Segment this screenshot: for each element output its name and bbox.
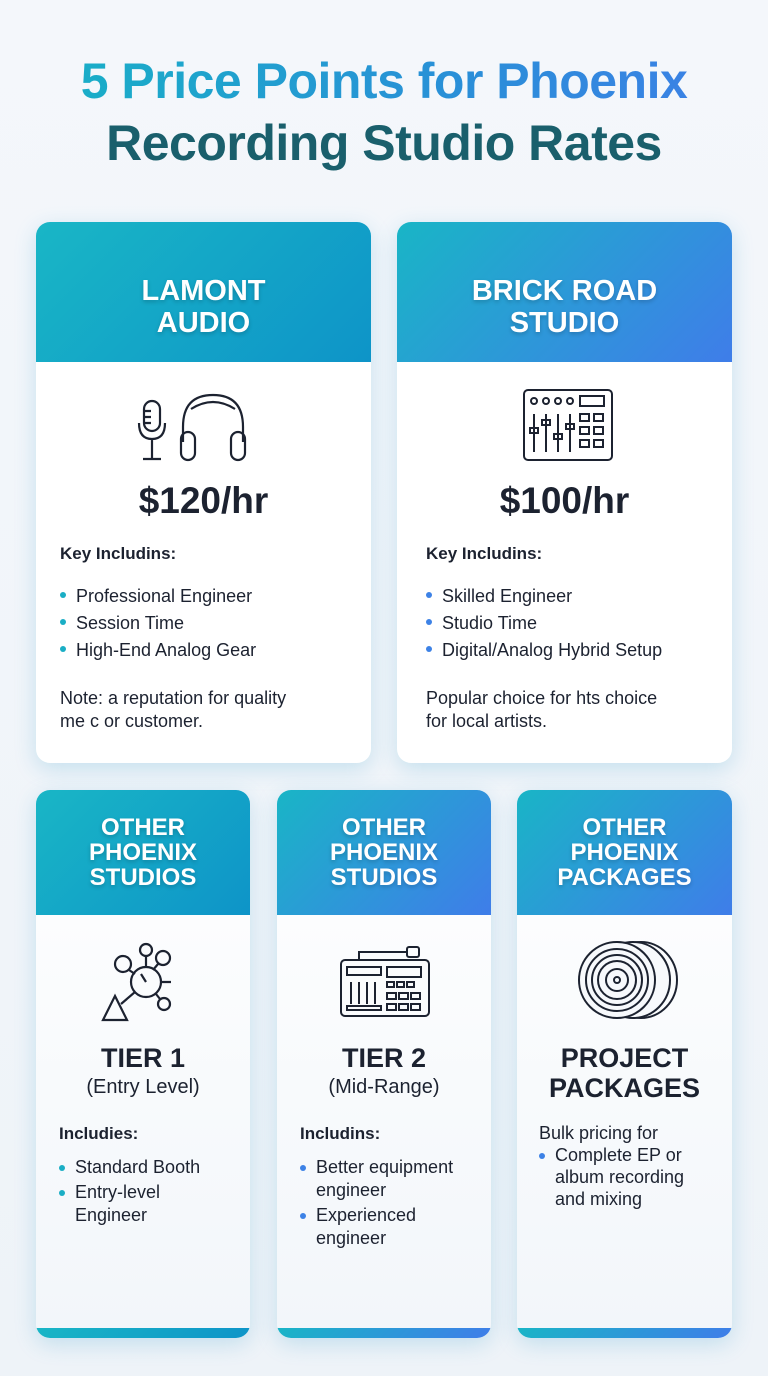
bullets: engineer [316, 1228, 386, 1248]
header: Lamont Audio [36, 222, 371, 362]
header: STUDIOS [90, 864, 196, 891]
bullets: Skilled Engineer [442, 586, 572, 606]
bullets [59, 1157, 200, 1225]
note: for local artists. [426, 711, 547, 731]
tier title: (Mid-Range) [328, 1076, 440, 1098]
title: 5 Price Points for Phoenix [81, 53, 687, 109]
note [60, 688, 286, 731]
header: STUDIOS [331, 864, 437, 891]
tier title: TIER 2 [342, 1043, 426, 1073]
label: Key Includins: [60, 544, 176, 563]
tier title [328, 1043, 440, 1098]
header: PHOENIX [89, 839, 197, 866]
price: $100/hr [500, 480, 629, 521]
bullets: engineer [316, 1180, 386, 1200]
panel: Brick Road Studio [397, 222, 732, 763]
header [277, 790, 491, 915]
panel: Project packages [517, 790, 732, 1338]
bullets: Entry-level [75, 1182, 160, 1202]
bullets: Professional Engineer [76, 586, 252, 606]
tier title: TIER 1 [101, 1043, 185, 1073]
header: Brick Road [397, 222, 732, 362]
title [81, 53, 688, 171]
label: Includies: [59, 1124, 138, 1143]
bullets: Complete EP or [555, 1145, 682, 1165]
header: OTHER [342, 814, 426, 841]
bullets: Studio Time [442, 613, 537, 633]
panel: Tier 1 [36, 790, 250, 1338]
icon: network [101, 942, 172, 1022]
note: Popular choice for hts choice [426, 688, 657, 708]
tier title: (Entry Level) [86, 1076, 200, 1098]
panel: Lamont Audio [36, 222, 371, 763]
header [517, 790, 732, 915]
header: OTHER [582, 814, 666, 841]
bullets: Engineer [75, 1205, 147, 1225]
icon: mixer [523, 389, 613, 461]
bullets: Standard Booth [75, 1157, 200, 1177]
bullets [539, 1145, 684, 1209]
header: OTHER [101, 814, 185, 841]
price: $120/hr [139, 480, 268, 521]
header: Brick Road: BRICK ROAD [472, 275, 657, 307]
bullets: Experienced [316, 1205, 416, 1225]
header: Brick Road: STUDIO [510, 307, 619, 339]
icon: records [578, 941, 678, 1019]
note [426, 688, 657, 731]
header: PHOENIX [330, 839, 438, 866]
header: PHOENIX [570, 839, 679, 866]
bullets [300, 1157, 453, 1248]
bullets [60, 586, 256, 660]
note: me c or customer. [60, 711, 203, 731]
package title: PROJECT [561, 1043, 688, 1073]
description: Bulk pricing for [539, 1123, 658, 1143]
header [36, 790, 250, 915]
bullets: and mixing [555, 1189, 642, 1209]
bullets: Better equipment [316, 1157, 453, 1177]
icon: mic and headphones [138, 394, 246, 462]
title: Recording Studio Rates [106, 115, 662, 171]
bullets: Session Time [76, 613, 184, 633]
bullets: High-End Analog Gear [76, 640, 256, 660]
package title: PACKAGES [549, 1073, 700, 1103]
bullets: Digital/Analog Hybrid Setup [442, 640, 662, 660]
header: Lamont Audio: AUDIO [157, 307, 250, 339]
label: Key Includins: [426, 544, 542, 563]
package title [549, 1043, 700, 1103]
label: Includins: [300, 1124, 380, 1143]
bullets: album recording [555, 1167, 684, 1187]
header: PACKAGES [557, 864, 692, 891]
note: Note: a reputation for quality [60, 688, 286, 708]
panel: Tier 2 [277, 790, 491, 1338]
bullets [426, 586, 662, 660]
icon: console [340, 946, 430, 1017]
header: Lamont Audio: LAMONT [141, 275, 266, 307]
tier title [86, 1043, 200, 1098]
